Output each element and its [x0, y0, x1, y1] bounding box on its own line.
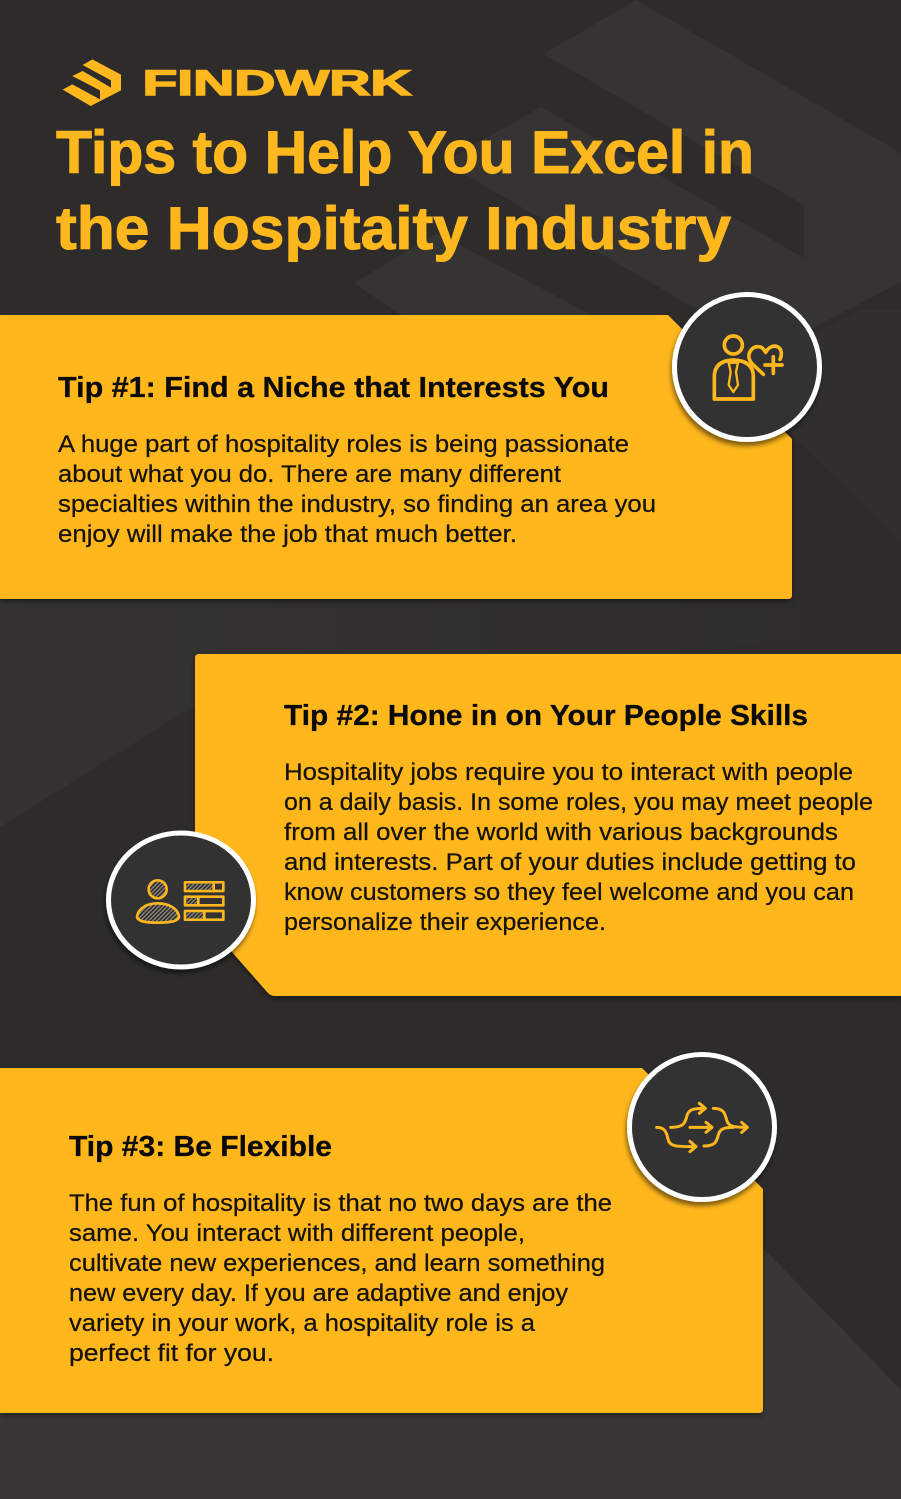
body text: about what you do. There are many different — [58, 461, 561, 488]
heading: Tip #2: Hone in on Your People Skills — [284, 700, 808, 732]
body text: A huge part of hospitality roles is being passionate — [58, 431, 629, 458]
body text: know customers so they feel welcome and you can — [284, 879, 854, 906]
icon circle — [674, 294, 820, 440]
body text: new every day. If you are adaptive and enjoy — [69, 1280, 568, 1307]
body text: cultivate new experiences, and learn something — [69, 1250, 605, 1277]
body text — [69, 1190, 612, 1367]
icon: flexible branching arrows — [657, 1103, 747, 1152]
body text: Hospitality jobs require you to interact with people — [284, 759, 853, 786]
body text — [58, 431, 656, 548]
body text: from all over the world with various backgrounds — [284, 819, 838, 846]
panel: tip 2 — [108, 654, 901, 996]
body text: on a daily basis. In some roles, you may meet people — [284, 789, 873, 816]
title: the Hospitaity Industry — [56, 195, 732, 262]
icon circle — [630, 1054, 774, 1200]
icon: Findwrk logo mark — [63, 59, 121, 106]
body text: The fun of hospitality is that no two days are the — [69, 1190, 612, 1217]
wordmark: FINDWRK — [142, 64, 412, 103]
card background — [0, 315, 792, 599]
body text: perfect fit for you. — [69, 1340, 274, 1367]
body text: variety in your work, a hospitality role is a — [69, 1310, 536, 1337]
title — [56, 119, 754, 262]
card background — [0, 1068, 763, 1413]
body text: enjoy will make the job that much better. — [58, 521, 517, 548]
title: Tips to Help You Excel in — [56, 119, 754, 186]
panel: tip 1 — [0, 294, 820, 599]
card background — [195, 654, 901, 996]
heading: Tip #1: Find a Niche that Interests You — [58, 372, 609, 404]
heading: Tip #3: Be Flexible — [69, 1131, 332, 1163]
icon: person with heart — [714, 336, 782, 399]
icon: profile with skill bars — [137, 880, 223, 923]
body text: same. You interact with different people, — [69, 1220, 525, 1247]
panel: tip 3 — [0, 1054, 774, 1413]
icon circle — [108, 833, 254, 967]
logo — [63, 59, 412, 106]
body text: specialties within the industry, so finding an area you — [58, 491, 656, 518]
body text: personalize their experience. — [284, 909, 606, 936]
body text: and interests. Part of your duties include getting to — [284, 849, 856, 876]
body text — [284, 759, 873, 936]
